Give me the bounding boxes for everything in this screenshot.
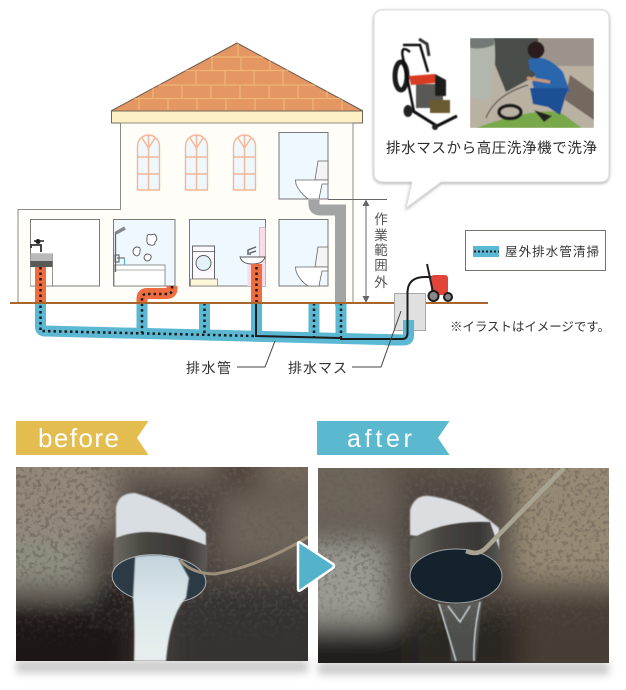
icon: pressure washer bbox=[395, 39, 457, 130]
work-range dimension: 囲 bbox=[374, 258, 388, 273]
before photo bbox=[16, 467, 308, 661]
legend: 屋外排水管清掃 bbox=[505, 244, 599, 259]
orange indoor pipes bbox=[40, 264, 256, 303]
house wall bbox=[18, 123, 353, 303]
black hose in pipe bbox=[256, 303, 340, 338]
ground line bbox=[10, 302, 488, 304]
work-range dimension bbox=[328, 200, 388, 303]
bathroom bbox=[114, 220, 175, 286]
callout: drain basin label bbox=[288, 311, 401, 376]
work-range dimension: 外 bbox=[374, 275, 388, 290]
roof bbox=[100, 43, 370, 111]
photo shadows bbox=[16, 660, 609, 675]
caption: 排水マスから高圧洗浄機で洗浄 bbox=[386, 140, 597, 157]
laundry room bbox=[190, 220, 266, 286]
speech bubble bbox=[374, 10, 609, 208]
work-range dimension: 業 bbox=[374, 228, 388, 243]
upstairs windows bbox=[138, 135, 256, 190]
after photo bbox=[318, 468, 609, 663]
downstairs toilet room bbox=[279, 220, 328, 286]
black dotted cleaning line bbox=[40, 267, 341, 338]
blue outdoor drain pipes bbox=[40, 303, 404, 340]
legend bbox=[466, 230, 606, 270]
callout: drain pipe: 排水管 bbox=[186, 360, 231, 376]
callout: drain basin label: 排水マス bbox=[288, 360, 347, 376]
pipe bbox=[410, 496, 499, 550]
drain basin bbox=[340, 277, 432, 340]
after banner: after bbox=[347, 425, 412, 453]
callout: drain pipe bbox=[186, 341, 275, 376]
after banner bbox=[317, 421, 450, 455]
work-range dimension: 範 bbox=[374, 243, 388, 258]
arrow: before to after bbox=[298, 542, 334, 591]
upstairs toilet room bbox=[279, 132, 328, 199]
note: ※イラストはイメージです。 bbox=[450, 320, 610, 334]
pressure washer cart bbox=[427, 264, 452, 301]
pipe bbox=[115, 492, 207, 546]
kitchen room bbox=[30, 220, 100, 286]
before banner: before bbox=[38, 423, 119, 453]
before banner bbox=[16, 421, 148, 455]
photo: worker cleaning bbox=[470, 38, 594, 128]
house illustration bbox=[18, 43, 370, 306]
eaves bbox=[112, 111, 362, 123]
grey drain stack bbox=[314, 200, 340, 303]
work-range dimension: 作 bbox=[374, 212, 388, 227]
